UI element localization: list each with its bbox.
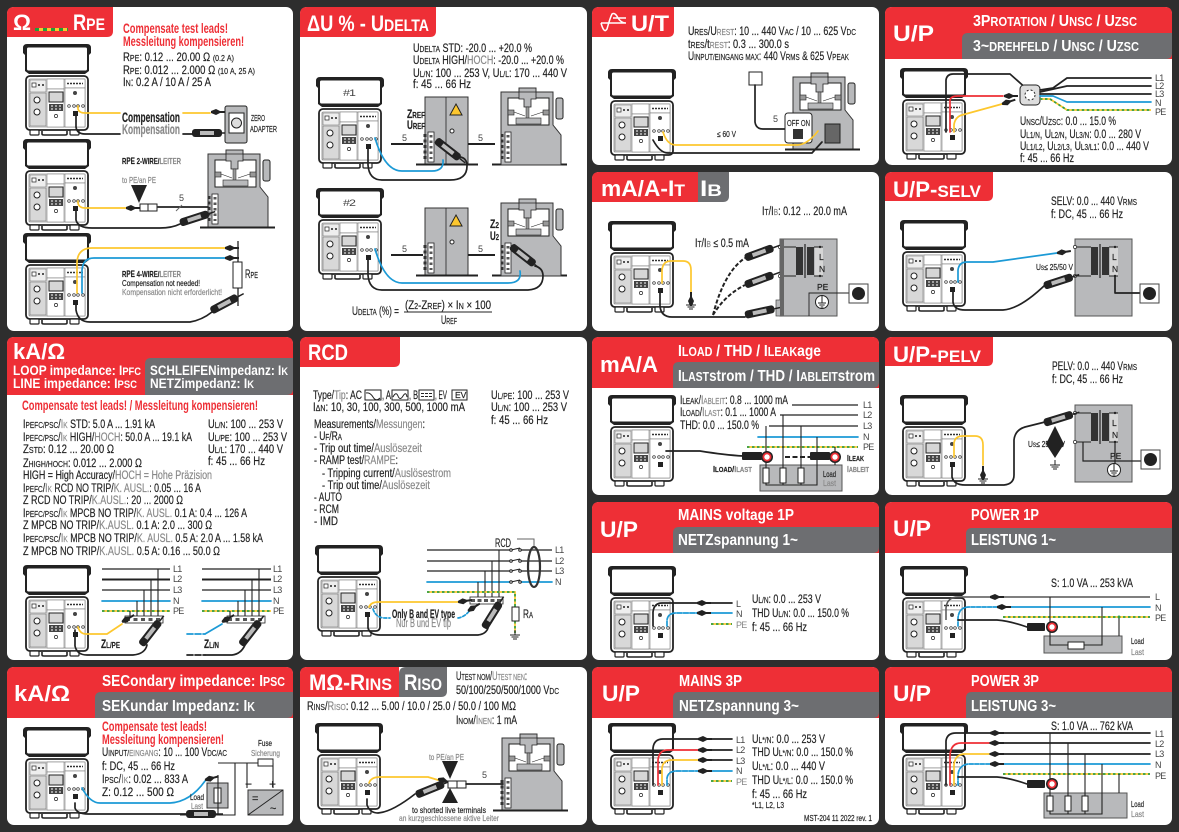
panel: kA/Ohm secondary impedance [7,667,293,825]
text: RCD types and current [313,390,467,414]
diagram: rotation wiring: N [1155,98,1161,108]
text: compensation and secondary ranges: Compensate test leads! [102,719,207,734]
heading: secondary impedance: SECondary impedance: IPSC [102,673,285,690]
diagram: secondary impedance wiring: Last [191,801,203,811]
panel: U/P PELV [885,337,1172,495]
heading: U/P-SELV: U/P-SELV [893,177,982,202]
text: impedance ranges: IPEFC/PSC/IK STD: 5.0 A ... 1.91 kA [23,419,155,431]
heading: kA/Ohm: LINE impedance: IPSC [13,375,137,391]
text: mains 1P ranges: f: 45 ... 66 Hz [752,622,807,634]
panel: U/P mains 1P [592,502,879,660]
diagram: measurement #2: U2 [490,231,499,243]
diagram: discharge time wiring: OFF ON [787,118,810,128]
text: impedance ranges: IPEFC/PSC/IK HIGH/HOCH: 50.0 A ... 19.1 kA [23,432,192,444]
heading: power 3P: POWER 3P [971,673,1039,690]
diagram: mains 3P wiring [608,723,747,814]
text: insulation ranges: 50/100/250/500/1000 VDC [456,685,559,697]
diagram: RPE 2-wire: to PE/an PE [122,175,156,185]
heading: kA/Ohm: NETZimpedanz: IK [150,375,254,391]
diagram: leakage measurement: PE [817,282,829,292]
heading: MOhm-RINS RISO: MΩ-RINS [309,670,392,695]
text: impedance ranges: Z MPCB NO TRIP/K.AUSL. 0.1 A: 2.0 ... 300 Ω [23,520,212,532]
diagram: mains 1P wiring: PE [736,620,747,630]
diagram: mains 1P wiring [608,566,747,657]
diagram: RCD wiring: Only B and EV type [392,609,455,621]
diagram: insulation wiring: 5 [482,770,487,780]
heading: mains 3P: U/P [602,681,640,706]
text: discharge ranges [688,26,856,63]
panel: tripping current mA/A-IT [592,172,879,331]
icon: B waveform [419,390,434,400]
diagram: mains 1P wiring: N [736,609,742,619]
diagram: power 3P wiring [900,723,1166,819]
text: compensation and secondary ranges [102,719,227,799]
text: measurement list: - IMD [314,516,338,528]
formula: UREF [441,315,457,327]
diagram: leakage measurement: N [819,264,825,274]
diagram: reference measurement #1: ZREF [407,109,425,121]
diagram: line impedance wiring [187,564,284,655]
diagram: SELV wiring: L [1112,252,1117,262]
text: compensation note and RPE ranges: RPE: 0.12 ... 20.00 Ω (0.2 A) [123,52,234,64]
diagram: mains 3P wiring: N [736,766,742,776]
heading: U/P rotation: 3PROTATION / UNSC / UZSC [973,13,1137,30]
heading: secondary impedance: SEKundar Impedanz: IK [102,698,255,715]
heading: mA/A: ILASTstrom / THD / IABLEITstrom [678,368,875,385]
diagram: insulation wiring: to shorted live terminals [412,805,486,815]
heading: U/P-PELV: U/P-PELV [893,342,982,367]
text: mains 3P ranges [752,734,853,810]
diagram: secondary impedance wiring [23,727,283,818]
diagram: mains 3P wiring: PE [736,777,747,787]
text: delta U ranges: UL/N: 100 ... 253 V, UL/L: 170 ... 440 V [413,68,567,80]
text: impedance ranges: IPEFC/PSC/IK MPCB NO TRIP/K. AUSL. 0.5 A: 2.0 A ... 1.58 kA [23,533,263,545]
heading: mA/A [592,337,879,388]
text: current ranges: ILEAK/IABLEIT: 0.8 ... 1000 mA [680,395,788,407]
heading: RCD: RCD [308,340,348,365]
diagram: line impedance wiring: L3 [273,585,282,595]
text: compensation note and RPE ranges: Compensate test leads! [123,21,228,36]
diagram: RCD wiring: L3 [555,566,564,576]
icon: A waveform [392,390,408,400]
diagram: power 1P wiring: N [1155,603,1161,613]
text: insulation ranges: UTEST NOM/UTEST NEN: [456,671,527,683]
diagram: RPE 2-wire: RPE 2-WIRE/LEITER [122,156,181,166]
text: impedance ranges: ZSTD: 0.12 ... 20.00 Ω [23,444,114,456]
diagram: discharge time wiring [608,69,860,160]
diagram: line impedance wiring: N [273,596,279,606]
diagram: loop impedance wiring: ZL/PE [101,639,120,651]
text: measurement list: - UF/RA [314,431,342,443]
panel: U/P 3-phase rotation [885,7,1172,165]
diagram: secondary impedance wiring: Load [190,792,204,802]
text: impedance ranges: HIGH = High Accuracy/HOCH = Hohe Präzision [23,470,212,482]
diagram: RPE 2-wire [23,139,275,230]
heading: MOhm-RINS RISO: RISO [404,670,442,695]
heading: mA/A-IT IB: IB [700,176,722,201]
heading: U/P-PELV [885,337,993,367]
panel: U/P power 3P [885,667,1172,825]
icon: discharge waveform [601,14,626,31]
diagram: RCD wiring: L1 [555,545,564,555]
text: IT range: IT/IB: 0.12 ... 20.0 mA [762,206,847,218]
heading: mains 3P: MAINS 3P [679,673,742,690]
diagram: power 3P wiring: Load [1131,799,1144,809]
panel: delta U [300,7,587,331]
diagram: clamp measurement: PE [863,442,874,452]
text: measurement list: - Trip out time/Auslösezeit [314,443,423,455]
diagram: loop impedance wiring: L1 [173,564,182,574]
diagram: compensation with zero adapter: ADAPTER [250,124,277,134]
heading: U/T [592,7,674,37]
text: measurement list: - Tripping current/Auslösestrom [322,468,451,480]
heading: RPE: RPE [73,10,105,35]
heading: mA/A: mA/A [600,352,658,377]
diagram: measurement #2: 5 [402,244,407,254]
diagram: reference measurement #1: 5 [478,133,483,143]
text: measurement list: - RAMP test/RAMPE: [314,455,398,467]
text: delta U ranges: f: 45 ... 66 Hz [413,79,471,91]
text: RCD voltage ranges: UL/N: 100 ... 253 V [491,402,567,414]
text: impedance ranges: ZHIGH/HOCH: 0.012 ... 2.000 Ω [23,458,142,470]
diagram: power 1P wiring: Load [1131,636,1144,646]
text: compensation warning: Compensate test leads! / Messleitung kompensieren! [22,398,258,413]
diagram: discharge time wiring: ≤ 60 V [717,129,736,139]
text: impedance ranges: IPEFC/IK RCD NO TRIP/K. AUSL.: 0.05 ... 16 A [23,483,201,495]
diagram: RPE 4-wire: Compensation not needed! [122,278,200,288]
text: discharge ranges: tRES/tREST: 0.3 ... 300.0 s [688,39,789,51]
diagram: compensation with zero adapter [23,44,277,143]
diagram: clamp measurement [608,395,874,491]
diagram: line impedance wiring: PE [273,606,284,616]
diagram: secondary impedance wiring: Sicherung [251,748,280,758]
diagram: secondary impedance wiring: ~ [270,803,276,815]
heading: mains voltage 1P: U/P [600,517,638,542]
diagram: secondary impedance wiring: Fuse [258,738,272,748]
text: mains 3P ranges: THD UL*/N: 0.0 ... 150.0 % [752,747,853,759]
diagram: rotation wiring: L3 [1155,89,1164,99]
heading: U/P rotation [885,7,1172,59]
text: insulation ranges: INOM/INEN: 1 mA [456,715,517,727]
diagram: measurement #2: 5 [478,244,483,254]
diagram: power 3P wiring: Last [1131,809,1145,819]
text: impedance ranges: Z RCD NO TRIP/K.AUSL.: 20 ... 2000 Ω [23,495,183,507]
text: voltage ranges: UL/N: 100 ... 253 V [208,419,283,431]
diagram: PELV wiring: L [1112,418,1117,428]
heading: kA/Ohm: LOOP impedance: IPFC [13,362,141,378]
text: IT range [695,206,847,250]
text: current ranges: THD: 0.0 ... 150.0 % [680,420,759,432]
diagram: compensation with zero adapter: ZERO [251,113,265,123]
diagram: compensation with zero adapter: Kompensation [122,122,180,137]
diagram: clamp measurement: N [863,432,869,442]
diagram: reference measurement #1: UREF [407,120,425,132]
diagram: power 3P wiring: N [1155,760,1161,770]
text: voltage ranges: f: 45 ... 66 Hz [208,456,265,468]
text: measurement list [314,419,451,528]
diagram: RPE 2-wire: 5 [179,193,184,203]
text: insulation ranges [307,671,559,727]
text: rotation ranges: f: 45 ... 66 Hz [1020,153,1074,165]
text: discharge ranges: UINPUT/EINGANG MAX: 440 VRMS & 625 VPEAK [688,51,849,63]
diagram: power 1P wiring: PE [1155,613,1166,623]
text: compensation note and RPE ranges [123,21,255,89]
diagram: secondary impedance wiring: = [252,793,258,805]
text: delta U ranges: UDELTA STD: -20.0 ... +20.0 % [413,43,532,55]
diagram: clamp measurement: IABLEIT [847,464,870,474]
text: SELV ranges: f: DC, 45 ... 66 Hz [1051,209,1123,221]
diagram: mains 3P wiring: L2 [736,745,745,755]
text: IT range: IT/IB ≤ 0.5 mA [695,238,749,250]
panel: U/T [592,7,879,165]
text: voltage ranges: UL/PE: 100 ... 253 V [208,432,287,444]
text: compensation and secondary ranges: IPSC/IK: 0.02 ... 833 A [102,774,188,786]
heading: kA/Ohm: SCHLEIFENimpedanz: IK [150,362,288,378]
text: mains 3P ranges: UL*/N: 0.0 ... 253 V [752,734,825,746]
text: delta U ranges: UDELTA HIGH/HOCH: -20.0 ... +20.0 % [413,55,564,67]
diagram: line impedance wiring: L1 [273,564,282,574]
diagram: mains 1P wiring: L [736,599,741,609]
diagram: SELV wiring: N [1112,264,1118,274]
heading: power 1P: U/P [893,516,931,541]
heading: U/T: U/T [631,11,670,36]
diagram: clamp measurement: L3 [863,421,872,431]
heading: power 3P: U/P [893,681,931,706]
text: mains 3P ranges: f: 45 ... 66 Hz [752,789,807,801]
diagram: RPE 4-wire: RPE [245,269,258,281]
diagram: reference measurement #1 [316,77,567,180]
diagram: mains 3P wiring: L1 [736,735,745,745]
diagram: SELV wiring [900,220,1159,316]
text: apparent power range: S: 1.0 VA ... 253 kVA [1051,578,1133,590]
diagram: clamp measurement: Load [823,469,836,479]
diagram: rotation wiring: PE [1155,107,1166,117]
diagram: insulation wiring: an kurzgeschlossene aktive Leiter [399,813,499,823]
text: delta U ranges [413,43,567,91]
text: mains 3P ranges: THD UL*/L: 0.0 ... 150.0 % [752,775,853,787]
diagram: loop impedance wiring: N [173,596,179,606]
text: RCD voltage ranges: f: 45 ... 66 Hz [491,415,548,427]
text: compensation and secondary ranges: f: DC, 45 ... 66 Hz [102,761,175,773]
diagram: clamp measurement: Last [823,478,837,488]
panel: kA/Ohm loop and line impedance [7,337,293,660]
text: current ranges [680,395,788,432]
diagram: compensation with zero adapter: Compensation [122,110,180,125]
diagram: secondary impedance wiring: − [245,777,252,791]
diagram: secondary impedance wiring: + [269,777,276,791]
text: RCD voltage ranges: UL/PE: 100 ... 253 V [491,390,569,402]
text: insulation ranges: RINS/RISO: 0.12 ... 5.00 / 10.0 / 25.0 / 50.0 / 100 MΩ [307,701,516,713]
heading: secondary impedance: kA/Ω [14,681,70,706]
text: SELV ranges [1051,196,1137,221]
diagram: clamp measurement: L1 [863,400,872,410]
heading: mains voltage 1P: NETZspannung 1~ [678,532,798,549]
text: voltage ranges [208,419,287,468]
diagram: discharge time wiring: 5 [773,114,778,124]
formula [352,300,492,327]
text: current ranges: ILOAD/ILAST: 0.1 ... 1000 A [680,407,776,419]
diagram: RPE 4-wire: RPE 4-WIRE/LEITER [122,269,181,279]
diagram: measurement #2: #2 [343,198,356,208]
heading: power 1P: LEISTUNG 1~ [971,532,1056,549]
text: discharge ranges: URES/UREST: 10 ... 440 VAC / 10 ... 625 VDC [688,26,856,38]
diagram: loop impedance wiring: L3 [173,585,182,595]
text: apparent power range: S: 1.0 VA ... 762 kVA [1051,721,1133,733]
diagram: SELV wiring: US≤ 25/50 V [1036,262,1073,272]
diagram: RCD wiring: N [555,577,561,587]
text: rotation ranges: UL1/N, UL2/N, UL3/N: 0.0 ... 280 V [1020,129,1141,141]
text: PELV ranges: f: DC, 45 ... 66 Hz [1052,374,1123,386]
diagram: power 1P wiring: Last [1131,647,1145,657]
diagram: power 3P wiring: PE [1155,771,1166,781]
diagram: loop impedance wiring: L2 [173,574,182,584]
text: rotation ranges: UNSC/UZSC: 0.0 ... 15.0 % [1020,116,1116,128]
text: measurement list: Measurements/Messungen: [314,419,425,431]
diagram: clamp measurement: ILEAK [847,453,864,463]
heading: mA/A-IT IB: mA/A-IT [601,176,686,201]
text: PELV ranges: PELV: 0.0 ... 440 VRMS [1052,361,1137,373]
heading: U/P rotation: 3~DREHFELD / UNSC / UZSC [973,38,1139,55]
heading: U/P rotation: U/P [893,21,934,46]
text: voltage ranges: UL/L: 170 ... 440 V [208,444,283,456]
diagram: RCD wiring: RA [523,609,533,621]
diagram: RCD wiring: RCD [495,538,511,550]
formula: UDELTA (%) = [352,306,399,318]
heading: mains voltage 1P [592,502,879,553]
panel: RPE continuity [7,7,293,331]
diagram: reference measurement #1: #1 [343,88,356,98]
text: impedance ranges [23,419,263,558]
diagram: RCD wiring [315,538,564,639]
text: impedance ranges: IPEFC/PSC/IK MPCB NO TRIP/K. AUSL. 0.1 A: 0.4 ... 126 A [23,508,247,520]
diagram: PELV wiring: N [1112,430,1118,440]
diagram: line impedance wiring: ZL/N [204,639,219,651]
heading: power 1P: POWER 1P [971,507,1039,524]
heading: power 3P [885,667,1172,718]
diagram: rotation wiring: L1 [1155,73,1164,83]
diagram: loop impedance wiring [23,564,184,656]
text: mains 3P ranges: *L1, L2, L3 [752,800,784,810]
diagram: leakage measurement [608,221,868,319]
diagram: line impedance wiring: L2 [273,574,282,584]
heading: mains 3P [592,667,879,718]
text: mains 1P ranges [752,594,849,634]
panel: U/P power 1P [885,502,1172,660]
heading: power 1P [885,502,1172,553]
text: RCD voltage ranges [491,390,569,427]
diagram: rotation wiring [900,68,1166,159]
text: measurement list: - AUTO [314,492,342,504]
text: mains 3P ranges: UL*/L: 0.0 ... 440 V [752,761,825,773]
text: RCD types and current: , A [382,390,391,402]
diagram: reference measurement #1: 5 [402,133,407,143]
diagram: power 1P wiring: L [1155,592,1160,602]
text: compensation note and RPE ranges: RPE: 0.012 ... 2.000 Ω (10 A, 25 A) [123,65,255,77]
diagram: clamp measurement: L2 [863,410,872,420]
text: compensation note and RPE ranges: Messleitung kompensieren! [123,34,244,49]
heading: RPE [7,7,113,37]
icon: EV label: EV [455,390,467,400]
diagram: insulation wiring: to PE/an PE [429,752,464,762]
text: RCD types and current: Type/Tip: AC [313,390,362,402]
text: compensation and secondary ranges: UINPUT/EINGANG: 10 ... 100 VDC/AC [102,747,227,759]
text: measurement list: - RCM [314,504,339,516]
diagram: insulation wiring [315,723,568,823]
heading: MOhm-RINS RISO [300,667,447,697]
heading: power 3P: LEISTUNG 3~ [971,698,1056,715]
heading: RPE: Ω [13,10,31,35]
diagram: PELV wiring [900,395,1160,486]
diagram: loop impedance wiring: PE [173,606,184,616]
diagram: RPE 4-wire [23,233,258,324]
diagram: mains 3P wiring: L3 [736,756,745,766]
diagram: RCD wiring: Nur B und EV tip [396,618,451,630]
text: rotation ranges: UL1/L2, UL2/L3, UL3/L1: 0.0 ... 440 V [1020,141,1149,153]
diagram: leakage measurement: L [819,252,824,262]
text: mains 1P ranges: THD UL/N: 0.0 ... 150.0 % [752,608,849,620]
text: mains 1P ranges: UL/N: 0.0 ... 253 V [752,594,821,606]
text: compensation and secondary ranges: Messleitung kompensieren! [102,732,224,747]
icon: AC waveform [365,390,381,400]
text: PELV ranges [1052,361,1137,386]
heading: RCD [300,337,400,367]
text: document revision: MST-204 11 2022 rev. 1 [804,813,872,823]
diagram: power 3P wiring: L1 [1155,729,1164,739]
diagram: clamp measurement: ILOAD/ILAST [713,464,753,474]
text: RCD types and current: , B [409,390,418,402]
diagram: power 1P wiring [900,566,1166,657]
text: compensation and secondary ranges: Z: 0.12 ... 500 Ω [102,787,174,799]
text: rotation ranges [1020,116,1149,165]
panel: U/P mains 3P [592,667,879,825]
heading: kA/Ohm [7,337,293,395]
text: SELV ranges: SELV: 0.0 ... 440 VRMS [1051,196,1137,208]
panel: RCD [300,337,587,660]
text: measurement list: - Trip out time/Auslösezeit [322,480,431,492]
diagram: power 3P wiring: L2 [1155,739,1164,749]
diagram: rotation wiring: L2 [1155,81,1164,91]
text: impedance ranges: Z MPCB NO TRIP/K.AUSL. 0.5 A: 0.16 ... 50.0 Ω [23,546,220,558]
text: compensation note and RPE ranges: IN: 0.2 A / 10 A / 25 A [123,77,211,89]
diagram: measurement #2 [316,188,567,290]
heading: mains 3P: NETZspannung 3~ [679,698,799,715]
formula: (Z2-ZREF) × IN × 100 [405,300,491,312]
heading: mA/A: ILOAD / THD / ILEAKage [678,343,821,360]
heading: mA/A-IT IB [592,172,729,202]
diagram: RCD wiring: L2 [555,556,564,566]
heading: secondary impedance [7,667,293,718]
text: RCD types and current: IΔN: 10, 30, 100, 300, 500, 1000 mA [313,402,465,414]
diagram: RPE 4-wire: Kompensation nicht erforderlicht! [122,287,222,297]
panel: insulation resistance [300,667,587,825]
diagram: PELV wiring: PE [1110,451,1122,461]
heading: mains voltage 1P: MAINS voltage 1P [678,507,794,524]
text: RCD types and current: , EV [435,390,447,402]
heading: kA/Ohm: kA/Ω [13,339,65,364]
heading: U/P-SELV [885,172,993,202]
panel: mA/A load and leakage [592,337,879,495]
panel: U/P SELV [885,172,1172,331]
diagram: measurement #2: Z2 [490,219,499,231]
diagram: power 3P wiring: L3 [1155,749,1164,759]
heading: delta U %: ΔU % - UDELTA [307,11,429,36]
diagram: PELV wiring: US≤ 25/50 V [1028,439,1065,449]
